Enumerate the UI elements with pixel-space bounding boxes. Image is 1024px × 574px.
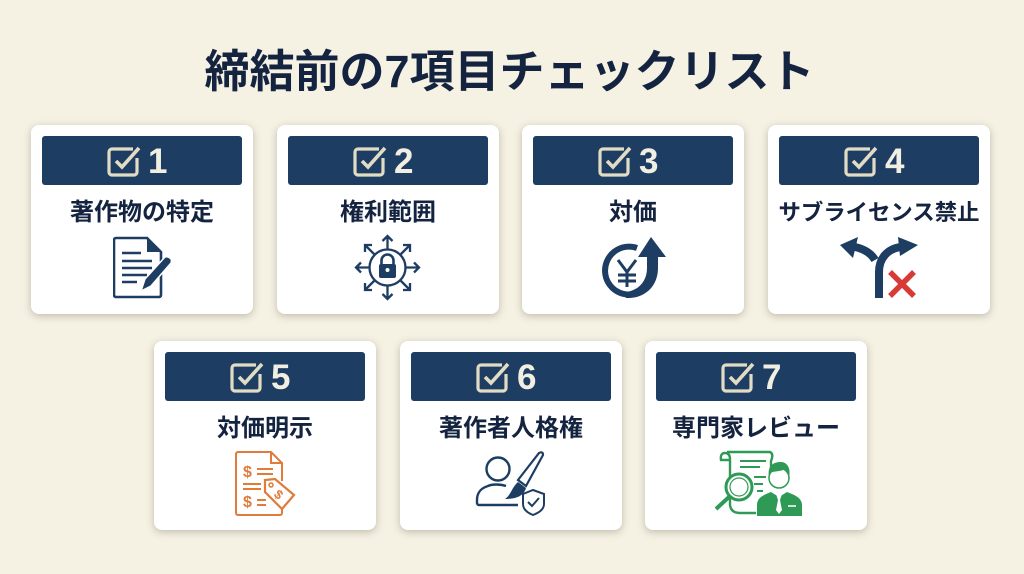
label: 著作物の特定 [70, 199, 214, 226]
panel: item 2 [277, 125, 499, 314]
icon: checkbox [721, 362, 754, 393]
header bar 6 [411, 352, 611, 401]
header bar 4 [779, 136, 979, 185]
number: 4 [885, 142, 904, 181]
icon: checkbox [230, 362, 264, 393]
number: 3 [639, 142, 658, 181]
panel: item 5 [154, 341, 376, 530]
number: 7 [762, 358, 781, 397]
icon: invoice with price tag: $ [271, 486, 287, 503]
label: 対価明示 [217, 415, 313, 442]
icon: checkbox [476, 362, 510, 393]
title: 締結前の7項目チェックリスト [204, 46, 815, 97]
label: 専門家レビュー [672, 415, 840, 442]
icon: lock with arrows [354, 234, 420, 300]
icon: invoice with price tag: $ [243, 494, 252, 511]
panel: item 7 [645, 341, 867, 530]
panel: item 3 [522, 125, 744, 314]
header bar 1 [42, 136, 242, 185]
icon: checkbox [844, 146, 878, 177]
panel: item 6 [400, 341, 622, 530]
number: 6 [517, 358, 536, 397]
number: 2 [394, 142, 413, 181]
header bar 5 [165, 352, 365, 401]
icon: checkbox [107, 146, 140, 177]
icon: checkbox [598, 146, 632, 177]
header bar 2 [288, 136, 488, 185]
label: 対価 [609, 199, 657, 226]
icon: checkbox [353, 146, 386, 177]
icon: forked arrows with red cross [840, 237, 918, 298]
icon: yen with up arrow [602, 237, 666, 298]
number: 1 [148, 142, 167, 181]
icon: invoice with price tag: $ [243, 464, 252, 481]
icon: person, brush and shield [476, 451, 545, 516]
header bar 7 [656, 352, 856, 401]
header bar 3 [533, 136, 733, 185]
number: 5 [271, 358, 290, 397]
label: 著作者人格権 [439, 415, 583, 442]
label: サブライセンス禁止 [778, 200, 980, 225]
panel: item 1 [31, 125, 253, 314]
icon: document and pen [113, 236, 171, 298]
label: 権利範囲 [340, 199, 436, 226]
icon: scroll, magnifier and expert [714, 450, 802, 516]
icon: invoice with price tag [235, 451, 296, 516]
panel: item 4 [768, 125, 990, 314]
